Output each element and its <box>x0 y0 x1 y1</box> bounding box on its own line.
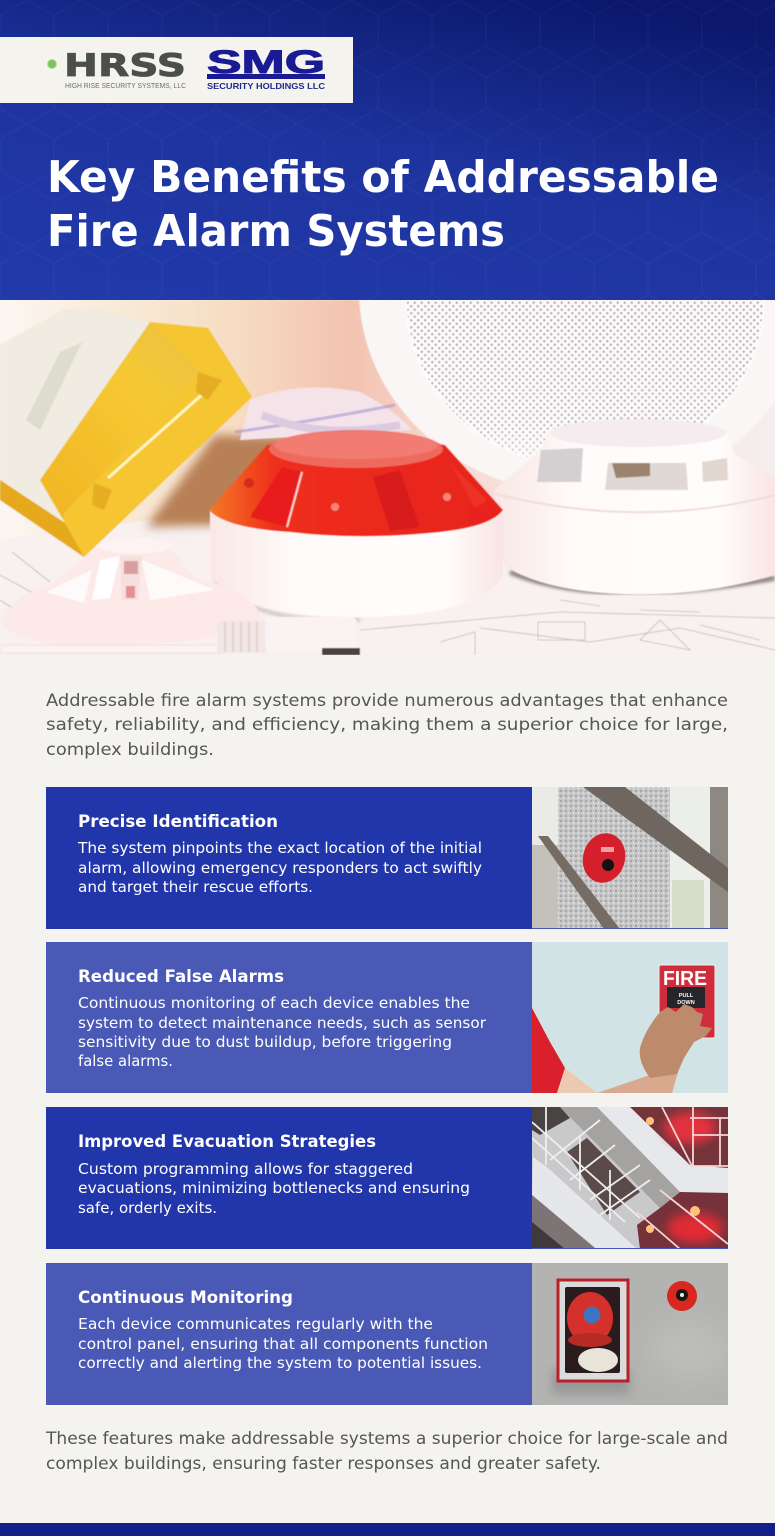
body text <box>78 1160 470 1217</box>
body text <box>78 1315 488 1372</box>
heading: Continuous Monitoring <box>78 1288 293 1308</box>
panel: improved evacuation strategies <box>46 1107 532 1249</box>
red strobe <box>209 430 503 620</box>
panel: continuous monitoring <box>46 1263 532 1405</box>
logo: SMG: SECURITY HOLDINGS LLC <box>207 81 325 91</box>
heading: Precise Identification <box>78 812 278 832</box>
closing text <box>45 1429 728 1474</box>
header banner <box>0 0 775 300</box>
logo: SMG: SMG <box>207 44 325 80</box>
photo: hand pulling fire alarm: FIRE <box>663 968 707 990</box>
panel: reduced false alarms <box>46 942 532 1093</box>
heading: Reduced False Alarms <box>78 967 284 987</box>
photo: stairwell with red lights <box>532 1107 728 1249</box>
intro text: complex buildings. <box>46 740 214 760</box>
photo: hand pulling fire alarm: DOWN <box>677 1000 695 1006</box>
body text: Custom programming allows for staggered <box>78 1160 413 1178</box>
yellow call point <box>0 308 252 557</box>
intro text: Addressable fire alarm systems provide numerous advantages that enhance <box>46 691 728 711</box>
brown shadow area behind devices <box>142 428 287 534</box>
logo: HRSS <box>48 48 187 90</box>
title <box>47 152 719 257</box>
body text: Continuous monitoring of each device enables the <box>78 994 470 1012</box>
photo: hand pulling fire alarm <box>532 942 728 1093</box>
logo: HRSS: HRSS <box>64 48 186 84</box>
logo: HRSS: HIGH RISE SECURITY SYSTEMS, LLC <box>65 81 187 90</box>
closing text: These features make addressable systems a superior choice for large-scale and <box>45 1429 728 1449</box>
photo: hand pulling fire alarm: PULL <box>679 993 694 999</box>
body text: Each device communicates regularly with the <box>78 1315 433 1333</box>
body text: and target their rescue efforts. <box>78 878 313 896</box>
body text: system to detect maintenance needs, such as sensor <box>78 1014 487 1032</box>
logo: SMG <box>207 44 325 91</box>
white detector right <box>494 419 775 594</box>
lilac device behind <box>235 388 412 440</box>
body text: The system pinpoints the exact location of the initial <box>77 839 482 857</box>
white detector left <box>10 555 258 621</box>
title: Fire Alarm Systems <box>47 206 505 257</box>
speaker <box>358 300 768 482</box>
body text: control panel, ensuring that all components function <box>78 1335 488 1353</box>
photo: hose cabinet and bell on concrete wall <box>532 1263 728 1405</box>
photo: wall alarm by stair rail <box>532 787 728 929</box>
body text <box>78 994 487 1070</box>
closing text: complex buildings, ensuring faster responses and greater safety. <box>46 1454 601 1474</box>
logo strip <box>0 37 353 103</box>
panel: precise identification <box>46 787 532 929</box>
body text <box>77 839 482 896</box>
hero photo: fire alarm devices <box>0 300 775 655</box>
floor plan paper <box>0 520 775 655</box>
cable connector <box>0 617 360 655</box>
body text: sensitivity due to dust buildup, before triggering <box>78 1033 452 1051</box>
body text: safe, orderly exits. <box>78 1199 217 1217</box>
body text: evacuations, minimizing bottlenecks and ensuring <box>78 1179 470 1197</box>
footer bar <box>0 1523 775 1536</box>
title: Key Benefits of Addressable <box>47 152 719 203</box>
intro text <box>46 691 728 760</box>
intro text: safety, reliability, and efficiency, making them a superior choice for large, <box>46 715 728 735</box>
heading: Improved Evacuation Strategies <box>78 1132 376 1152</box>
body text: alarm, allowing emergency responders to act swiftly <box>78 859 482 877</box>
body text: false alarms. <box>78 1052 173 1070</box>
body text: correctly and alerting the system to potential issues. <box>78 1354 482 1372</box>
